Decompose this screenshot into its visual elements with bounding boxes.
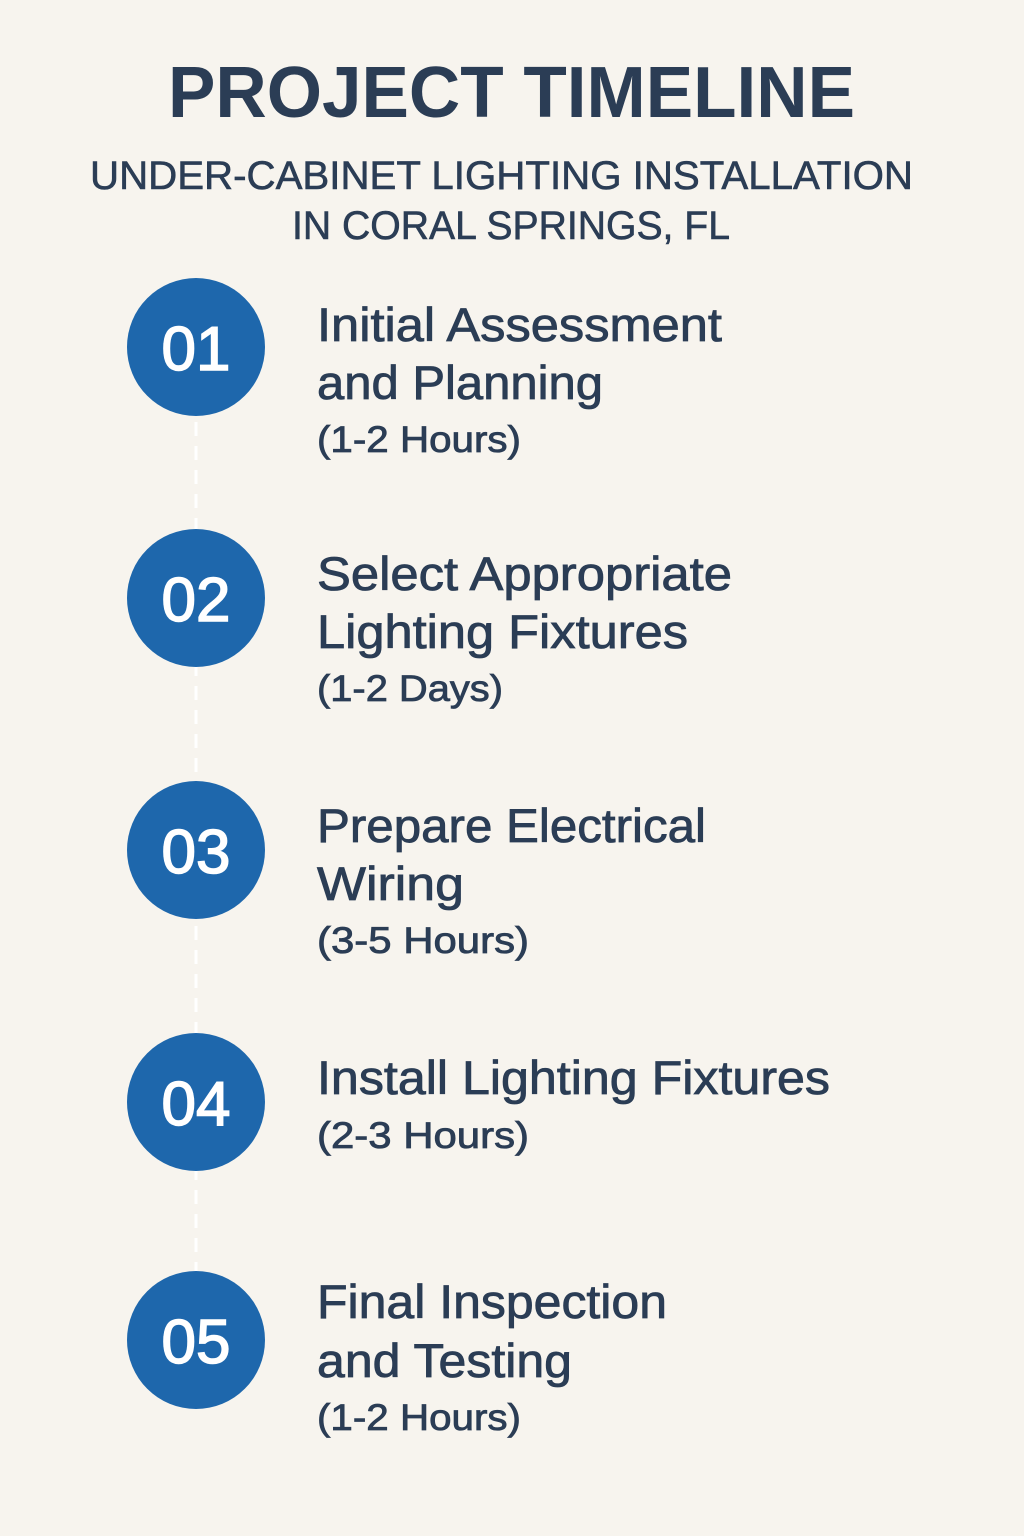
icon: circle 01: 01: [162, 315, 230, 384]
step 05: [127, 1271, 667, 1438]
step 05 text: and Testing: [317, 1334, 572, 1387]
icon: circle 03: [127, 781, 265, 919]
step 04 text: Install Lighting Fixtures: [317, 1051, 830, 1104]
icon: circle 04: 04: [162, 1070, 230, 1139]
icon: circle 01: [127, 278, 265, 416]
icon: circle 05: 05: [162, 1308, 230, 1377]
step 01 text: (1-2 Hours): [317, 419, 521, 460]
subtitle: UNDER-CABINET LIGHTING INSTALLATION: [90, 154, 913, 198]
subtitle: IN CORAL SPRINGS, FL: [292, 204, 730, 248]
step 05 text: (1-2 Hours): [317, 1397, 521, 1438]
step 04 text: (2-3 Hours): [317, 1115, 529, 1156]
step 03: [127, 781, 706, 961]
icon: circle 05: [127, 1271, 265, 1409]
step 01 text: Initial Assessment: [317, 298, 722, 351]
step 03 text: (3-5 Hours): [317, 920, 529, 961]
icon: circle 02: [127, 529, 265, 667]
subtitle: [90, 154, 913, 248]
step 03 text: Wiring: [317, 857, 464, 910]
step 01 text: and Planning: [317, 356, 603, 409]
step 05 text: Final Inspection: [317, 1275, 667, 1328]
icon: circle 04: [127, 1033, 265, 1171]
step 05 text: [317, 1275, 667, 1438]
title: PROJECT TIMELINE: [168, 53, 855, 133]
step 03 text: [317, 799, 706, 961]
step 03 text: Prepare Electrical: [317, 799, 706, 852]
step 01 text: [317, 298, 722, 460]
step 02 text: [317, 547, 732, 709]
icon: circle 02: 02: [162, 566, 230, 635]
step 04: [127, 1033, 830, 1171]
step 02: [127, 529, 732, 709]
step 04 text: [317, 1051, 830, 1156]
step 02 text: Lighting Fixtures: [317, 605, 688, 658]
step 02 text: (1-2 Days): [317, 668, 503, 709]
step 02 text: Select Appropriate: [317, 547, 732, 600]
icon: circle 03: 03: [162, 818, 230, 887]
step 01: [127, 278, 722, 460]
